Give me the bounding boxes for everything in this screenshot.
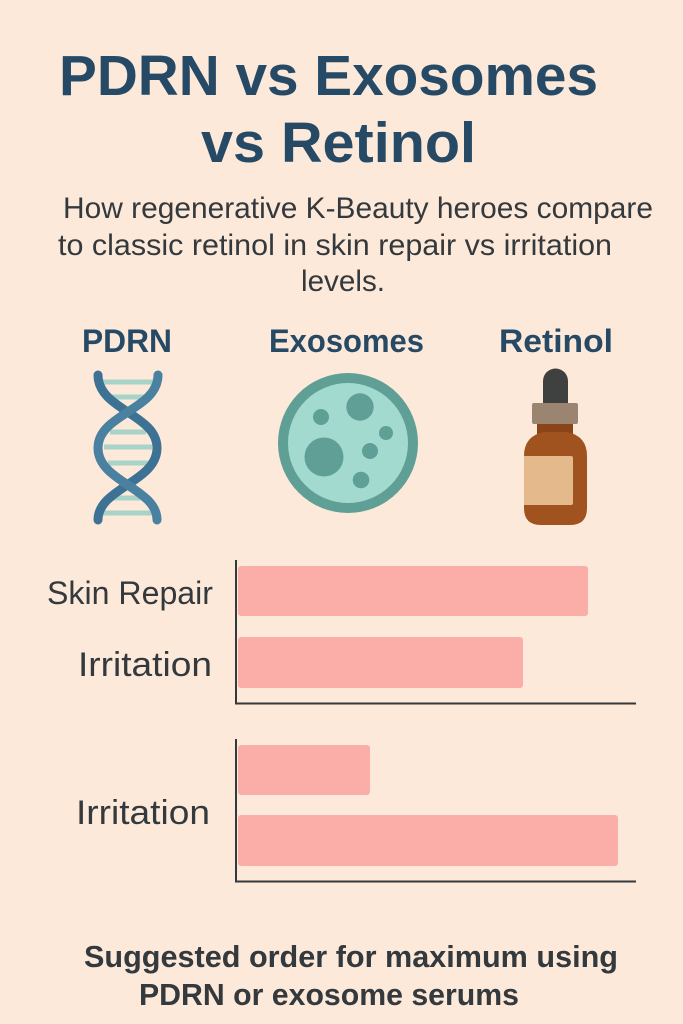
footer text	[84, 939, 618, 1012]
bar chart: top	[47, 560, 636, 704]
icon: retinol dropper bottle	[524, 368, 587, 525]
column heading: Exosomes: Exosomes	[269, 323, 424, 359]
bar: lower	[238, 815, 618, 866]
subtitle: How regenerative K-Beauty heroes compare	[63, 192, 653, 225]
icon: DNA helix	[98, 375, 158, 520]
footer text: PDRN or exosome serums	[139, 977, 519, 1012]
column heading: PDRN: PDRN	[82, 323, 172, 359]
bar: skin repair	[238, 566, 588, 616]
column heading: Retinol: Retinol	[499, 323, 613, 359]
title	[59, 44, 598, 175]
icon: exosome cell	[278, 373, 418, 513]
subtitle: levels.	[301, 265, 385, 298]
title: vs Retinol	[201, 111, 476, 175]
subtitle	[58, 192, 653, 298]
subtitle: to classic retinol in skin repair vs irritation	[58, 229, 612, 262]
label: Irritation: Irritation	[78, 646, 212, 684]
bar: irritation	[238, 637, 523, 688]
label: Skin Repair: Skin Repair	[47, 575, 213, 611]
label: Irritation: Irritation	[76, 794, 210, 832]
footer text: Suggested order for maximum using	[84, 939, 618, 974]
bar: upper	[238, 745, 370, 795]
title: PDRN vs Exosomes	[59, 44, 598, 108]
bar chart: bottom	[76, 739, 636, 882]
